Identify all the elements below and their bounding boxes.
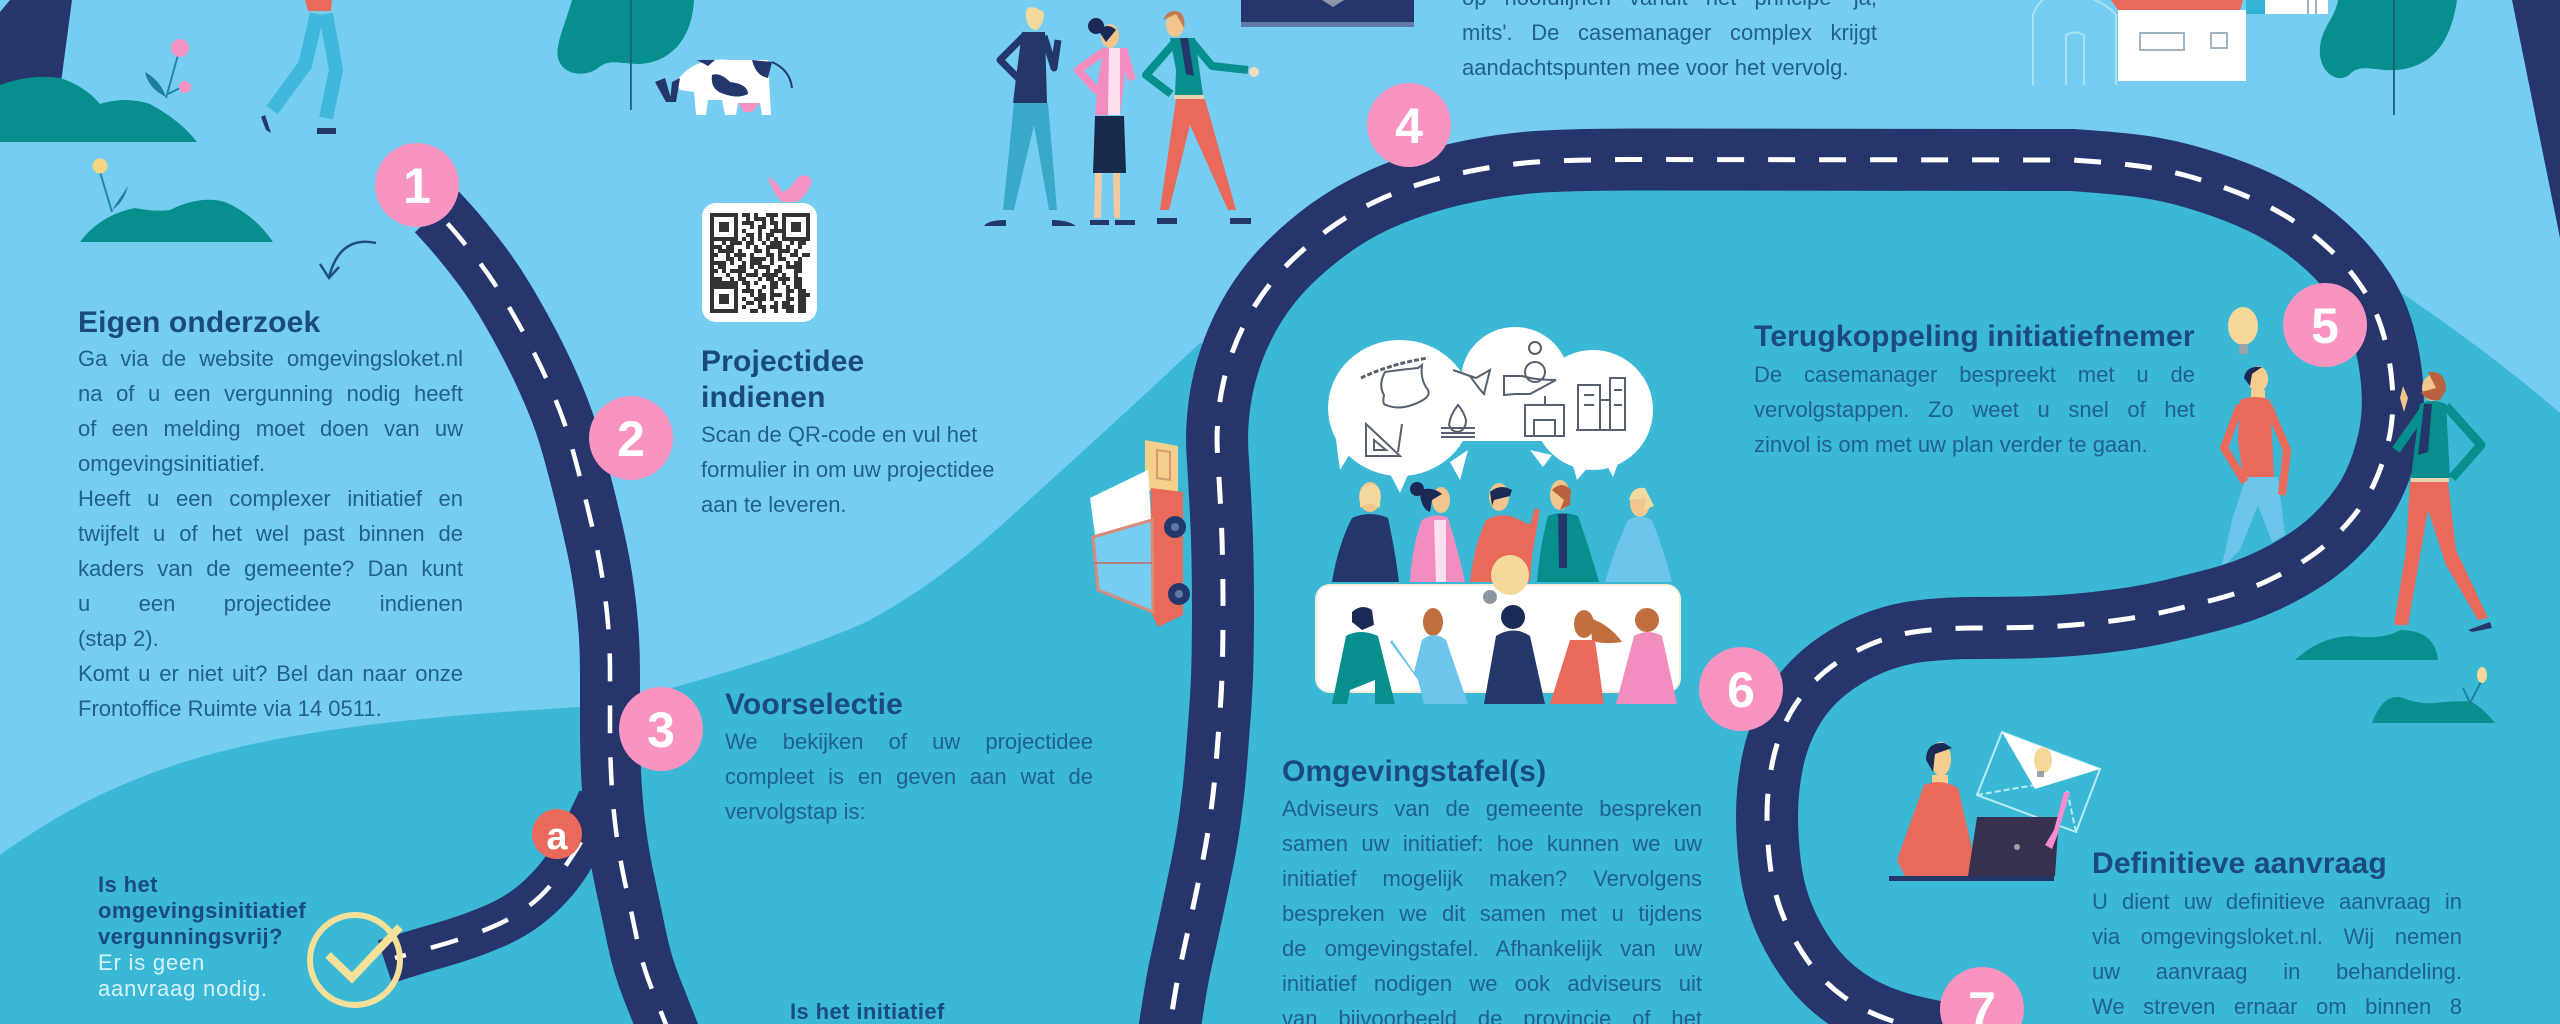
bush bottom right xyxy=(2295,630,2438,660)
text: Eigen onderzoek: u een projectidee indienen xyxy=(78,591,463,616)
flower pink xyxy=(145,39,191,98)
text: Voorselectie: compleet is en geven aan wat de xyxy=(725,764,1093,789)
step marker a xyxy=(532,809,582,859)
step 2: 2 xyxy=(617,411,645,467)
person: woman in pink xyxy=(1078,18,1135,225)
question: initiatief: Is het initiatief xyxy=(790,999,945,1024)
question: vergunningsvrij: aanvraag nodig. xyxy=(98,976,268,1001)
step 3: 3 xyxy=(647,702,675,758)
text: Projectidee indienen: formulier in om uw projectidee xyxy=(701,457,994,482)
text: Voorselectie: vervolgstap is: xyxy=(725,799,866,824)
question: vergunningsvrij: vergunningsvrij? xyxy=(98,924,283,949)
text: Omgevingstafel(s): de omgevingstafel. Afhankelijk van uw xyxy=(1282,936,1702,961)
light bulb on table xyxy=(1483,555,1529,604)
text: Definitieve aanvraag: We streven ernaar om binnen 8 xyxy=(2092,994,2462,1019)
text: Projectidee indienen: aan te leveren. xyxy=(701,492,847,517)
step 7 xyxy=(1940,967,2024,1024)
text: Definitieve aanvraag: uw aanvraag in behandeling. xyxy=(2092,959,2462,984)
text: Terugkoppeling initiatiefnemer: Terugkoppeling initiatiefnemer xyxy=(1754,320,2195,353)
cow xyxy=(655,60,792,115)
text: Projectidee indienen: Projectidee xyxy=(701,345,864,378)
check mark icon xyxy=(310,915,400,1005)
bubble icons xyxy=(1361,342,1626,456)
step 3 xyxy=(619,687,703,771)
text: Eigen onderzoek: (stap 2). xyxy=(78,626,159,651)
tree top centre xyxy=(557,0,694,110)
person: man in teal xyxy=(1146,11,1259,224)
text: Eigen onderzoek: na of u een vergunning nodig heeft xyxy=(78,381,463,406)
text: Voorselectie: Voorselectie xyxy=(725,688,903,721)
table xyxy=(1316,585,1680,692)
bird on QR xyxy=(768,175,812,202)
text: top paragraph: mits'. De casemanager complex krijgt xyxy=(1462,20,1877,45)
question: vergunningsvrij: Er is geen xyxy=(98,950,205,975)
road: steps 4 to 7 xyxy=(1165,160,2393,1024)
text: Eigen onderzoek: Heeft u een complexer initiatief en xyxy=(78,486,463,511)
step 6: 6 xyxy=(1727,662,1755,718)
text: Omgevingstafel(s): initiatief mogelijk maken? Vervolgens xyxy=(1282,866,1702,891)
step 5: 5 xyxy=(2311,298,2339,354)
text: Eigen onderzoek: Ga via de website omgevingsloket.nl xyxy=(78,346,463,371)
text: Definitieve aanvraag xyxy=(2092,847,2462,1019)
step 1 xyxy=(375,143,459,227)
step 2 xyxy=(589,396,673,480)
text: Voorselectie xyxy=(725,688,1093,824)
step 6 xyxy=(1699,647,1783,731)
bulb near step 5 xyxy=(2228,307,2258,354)
question: vergunningsvrij xyxy=(98,872,306,1001)
text: Eigen onderzoek: Eigen onderzoek xyxy=(78,306,320,339)
bush left with yellow flower xyxy=(80,158,273,242)
text: Voorselectie: We bekijken of uw projectidee xyxy=(725,729,1093,754)
top-right road fragment xyxy=(2512,0,2560,238)
text: Definitieve aanvraag: via omgevingsloket.nl. Wij nemen xyxy=(2092,924,2462,949)
road: steps 1 to 3 xyxy=(437,212,680,1024)
question: vergunningsvrij: omgevingsinitiatief xyxy=(98,898,306,923)
text: Eigen onderzoek: omgevingsinitiatief. xyxy=(78,451,265,476)
text: Definitieve aanvraag: U dient uw definitieve aanvraag in xyxy=(2092,889,2462,914)
text: Omgevingstafel(s): Adviseurs van de gemeente bespreken xyxy=(1282,796,1702,821)
text: Eigen onderzoek xyxy=(78,306,463,721)
step 1: 1 xyxy=(403,158,431,214)
text: Omgevingstafel(s): samen uw initiatief: hoe kunnen we uw xyxy=(1282,831,1702,856)
text: Eigen onderzoek: twijfelt u of het wel past binnen de xyxy=(78,521,463,546)
bush top-left xyxy=(0,77,197,142)
text: Omgevingstafel(s) xyxy=(1282,755,1702,1024)
text: Projectidee indienen xyxy=(701,345,994,517)
text: Eigen onderzoek: of een melding moet doen van uw xyxy=(78,416,463,441)
text: Terugkoppeling initiatiefnemer: vervolgstappen. Zo weet u snel of het xyxy=(1754,397,2195,422)
text: Eigen onderzoek: Komt u er niet uit? Bel dan naar onze xyxy=(78,661,463,686)
step 4 xyxy=(1367,83,1451,167)
text: top paragraph xyxy=(1462,0,1877,80)
question: vergunningsvrij: Is het xyxy=(98,872,158,897)
QR code xyxy=(702,175,817,322)
houses xyxy=(2033,0,2328,85)
text: Terugkoppeling initiatiefnemer xyxy=(1754,320,2195,457)
text: Terugkoppeling initiatiefnemer: De casemanager bespreekt met u de xyxy=(1754,362,2195,387)
text: top paragraph: aandachtspunten mee voor het vervolg. xyxy=(1462,55,1848,80)
text: Eigen onderzoek: kaders van de gemeente? Dan kunt xyxy=(78,556,463,581)
person: blonde man xyxy=(984,7,1076,226)
person in red near step 5 xyxy=(2222,366,2287,565)
text: Projectidee indienen: Scan de QR-code en vul het xyxy=(701,422,977,447)
text: Omgevingstafel(s): bespreken we dit samen met u tijdens xyxy=(1282,901,1702,926)
walking person xyxy=(261,0,336,134)
car xyxy=(1090,440,1190,627)
step marker a: a xyxy=(546,816,568,858)
curved arrow xyxy=(320,242,376,278)
step 5 xyxy=(2283,283,2367,367)
navy sign xyxy=(1241,0,1414,27)
road: branch a xyxy=(385,800,600,962)
top-left road fragment xyxy=(0,0,72,90)
text: Omgevingstafel(s): Omgevingstafel(s) xyxy=(1282,755,1546,788)
speech bubbles xyxy=(1328,327,1653,493)
man with beard near step 5 xyxy=(2394,372,2492,632)
back row people xyxy=(1332,480,1672,582)
text: Projectidee indienen: indienen xyxy=(701,381,826,414)
tree top right xyxy=(2320,0,2457,115)
step 4: 4 xyxy=(1395,98,1423,154)
text: Eigen onderzoek: Frontoffice Ruimte via 14 0511. xyxy=(78,696,382,721)
person with laptop and envelope xyxy=(1889,732,2100,881)
small bush with flower xyxy=(2372,667,2495,723)
text: Omgevingstafel(s): initiatief nodigen we ook adviseurs uit xyxy=(1282,971,1702,996)
front row people xyxy=(1332,605,1677,704)
text: Definitieve aanvraag: Definitieve aanvraag xyxy=(2092,847,2387,880)
three standing people xyxy=(984,7,1259,226)
text: Terugkoppeling initiatiefnemer: zinvol is om met uw plan verder te gaan. xyxy=(1754,432,2148,457)
